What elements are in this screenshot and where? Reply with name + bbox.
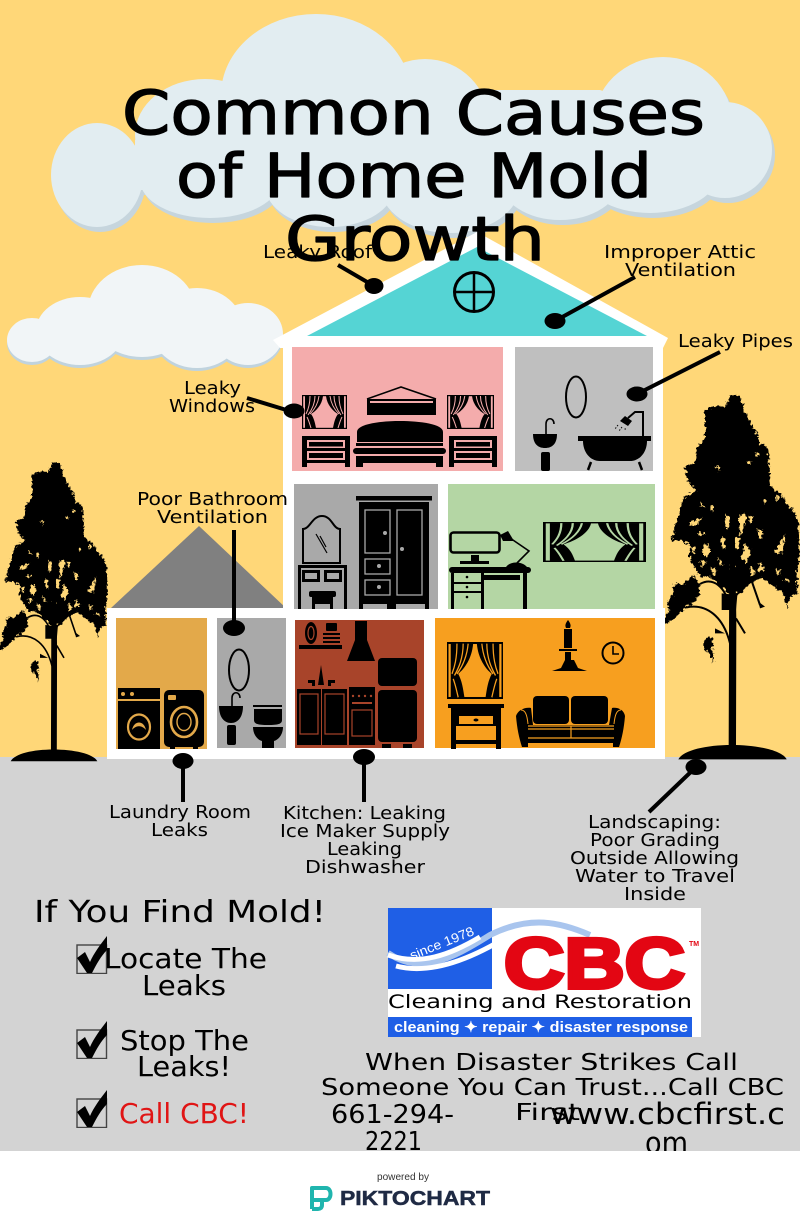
title: Growth: [285, 204, 545, 275]
sky background: [0, 0, 800, 757]
label: landscaping: Landscaping:: [588, 812, 721, 833]
label: leaky windows: Windows: [169, 396, 255, 417]
callout: when disaster strikes: Someone You Can Trust...Call CBC: [321, 1075, 784, 1101]
tree: left: [0, 461, 107, 761]
label: kitchen: Ice Maker Supply: [280, 821, 450, 842]
pointer: leaky roof: [338, 265, 384, 294]
label: landscaping: Water to Travel: [575, 866, 735, 887]
label: kitchen: [280, 803, 450, 878]
checklist item: stop the leaks: Stop The: [120, 1024, 249, 1057]
label: leaky pipes: Leaky Pipes: [678, 331, 793, 352]
house frame: [107, 232, 668, 759]
pointer: bathroom ventilation: [223, 530, 245, 636]
footer: [0, 1151, 800, 1231]
attic: [307, 247, 647, 336]
room: dressing room: [294, 484, 438, 609]
checklist item: locate the leaks: [104, 942, 267, 1002]
room: kitchen: [295, 620, 424, 748]
label: leaky windows: [169, 378, 255, 417]
checklist item: stop the leaks: Leaks!: [137, 1050, 231, 1083]
room: bedroom: [292, 347, 503, 471]
label: kitchen: Dishwasher: [305, 857, 426, 878]
logo: CBC: Cleaning and Restoration: [388, 991, 692, 1013]
pointers: [172, 265, 720, 812]
label: kitchen: Kitchen: Leaking: [283, 803, 446, 824]
ground: [0, 757, 800, 1151]
label: laundry room leaks: [109, 802, 251, 841]
logo: CBC: cleaning ✦ repair ✦ disaster response: [394, 1019, 688, 1036]
label: leaky roof: Leaky Roof: [263, 242, 373, 263]
pointer: laundry: [172, 753, 194, 802]
house: [107, 232, 668, 759]
room: downstairs bathroom: [217, 618, 286, 748]
website: www.cbcfirst.c: [550, 1097, 785, 1131]
phone number: 661-294-: [331, 1100, 454, 1130]
title: [122, 78, 705, 275]
callout: when disaster strikes: First: [515, 1100, 580, 1126]
checklist item: call cbc: Call CBC!: [119, 1097, 249, 1130]
icon: checkbox 1: [77, 936, 107, 974]
website: [550, 1097, 785, 1160]
room: living room: [435, 618, 655, 749]
label: laundry room leaks: Laundry Room: [109, 802, 251, 823]
callout: when disaster strikes: [321, 1050, 784, 1126]
checklist item: locate the leaks: Locate The: [104, 942, 267, 975]
logo: CBC: [388, 908, 701, 1037]
piktochart wordmark: PIKTOCHART: [340, 1188, 490, 1210]
pointer: attic: [544, 277, 635, 329]
small cloud: [7, 265, 283, 371]
room: upstairs bathroom: [515, 347, 653, 471]
title: Common Causes: [122, 78, 705, 149]
label: improper attic ventilation: Ventilation: [625, 260, 736, 281]
heading: if you find mold: If You Find Mold!: [34, 895, 326, 930]
checklist item: stop the leaks: [120, 1024, 249, 1083]
pointer: kitchen: [353, 749, 375, 802]
callout: when disaster strikes: When Disaster Strikes Call: [365, 1050, 738, 1076]
label: poor bathroom ventilation: Ventilation: [157, 507, 268, 528]
pointer: leaky pipes: [626, 352, 720, 402]
label: leaky windows: Leaky: [184, 378, 241, 399]
website: om: [645, 1126, 688, 1160]
label: landscaping: Inside: [624, 884, 686, 905]
annex roof: [111, 526, 286, 608]
logo: CBC: since 1978: [408, 923, 476, 963]
label: kitchen: Leaking: [327, 839, 402, 860]
label: improper attic ventilation: [604, 242, 756, 281]
logo: CBC: TM: [689, 941, 699, 948]
icon: piktochart logo: [312, 1188, 330, 1209]
pointer: landscaping: [649, 759, 706, 812]
logo: CBC: CBC: [504, 925, 685, 1004]
label: laundry room leaks: Leaks: [151, 820, 208, 841]
room: office: [448, 484, 655, 609]
powered by: powered by: [377, 1172, 429, 1183]
label: landscaping: Outside Allowing: [570, 848, 739, 869]
room: laundry: [116, 618, 207, 749]
phone number: 2221: [365, 1127, 422, 1157]
label: landscaping: Poor Grading: [590, 830, 720, 851]
checklist item: locate the leaks: Leaks: [142, 969, 226, 1002]
tree: right: [663, 394, 799, 759]
large cloud: [51, 14, 775, 238]
checklist: [77, 936, 267, 1130]
icon: checkbox 2: [77, 1021, 107, 1058]
label: poor bathroom ventilation: [137, 489, 288, 528]
pointer: leaky windows: [247, 398, 304, 418]
label: poor bathroom ventilation: Poor Bathroom: [137, 489, 288, 510]
label: landscaping: [570, 812, 739, 905]
phone number: [331, 1100, 454, 1157]
title: of Home Mold: [176, 141, 652, 212]
label: improper attic ventilation: Improper Attic: [604, 242, 756, 263]
icon: checkbox 3: [77, 1090, 107, 1128]
